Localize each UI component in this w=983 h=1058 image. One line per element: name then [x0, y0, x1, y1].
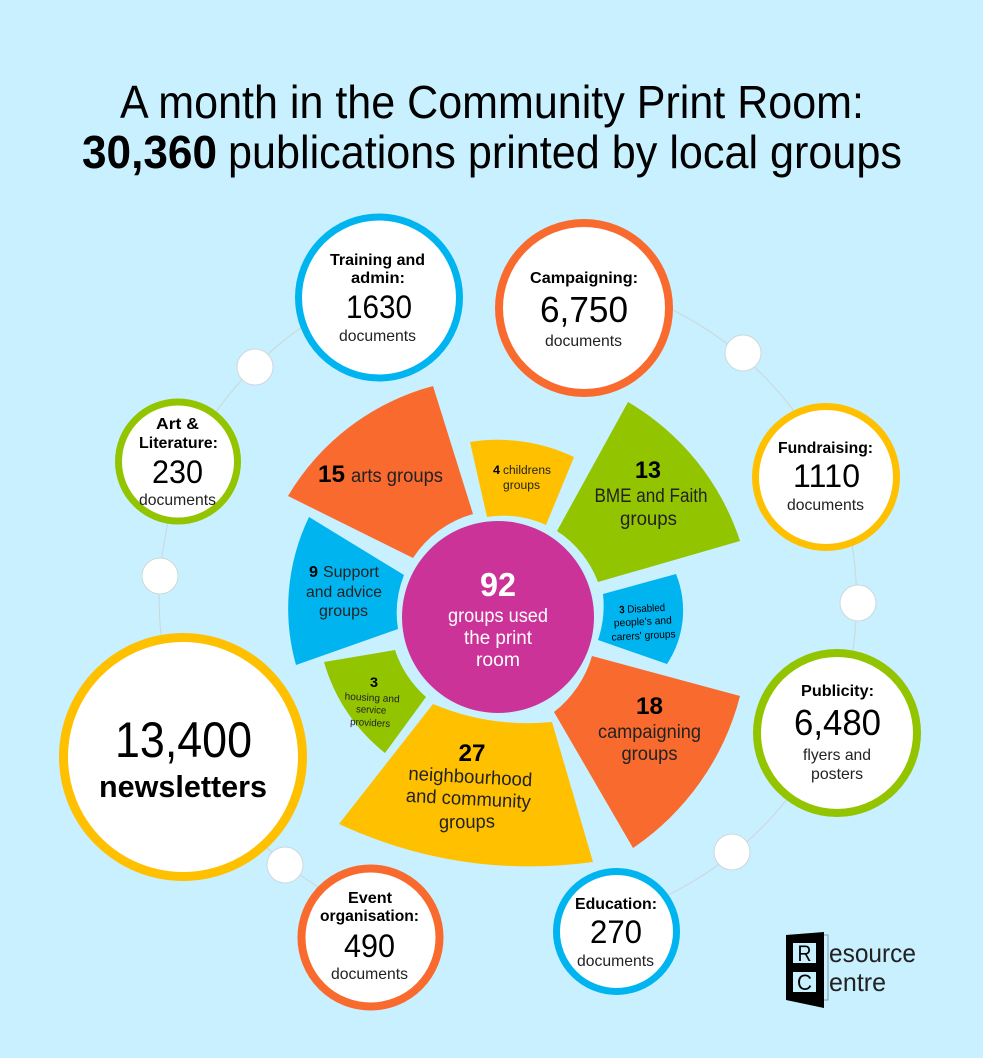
wedge: arts groups — [288, 386, 473, 558]
panel: publicity: 6,480 — [794, 702, 881, 743]
title: 30,360 — [82, 126, 217, 178]
panel: training and admin: Training and — [330, 252, 425, 269]
logo: Resource Centre: entre — [829, 967, 886, 997]
wedge: neighbourhood and community groups: groups — [439, 812, 495, 833]
centre circle: 92 groups: groups used — [448, 606, 548, 627]
panel: fundraising — [756, 406, 896, 548]
panel: event organisation: organisation: — [320, 908, 419, 925]
panel: fundraising: 1110 — [793, 458, 860, 494]
wedge: campaigning groups: groups — [622, 744, 678, 765]
wedge: campaigning groups: campaigning — [598, 722, 701, 743]
panel: art and literature: Literature: — [139, 435, 218, 452]
wedge: support and advice groups: and advice — [306, 584, 382, 601]
panel: education: documents — [577, 953, 654, 970]
wedge: neighbourhood and community groups: neighbourhood — [408, 764, 533, 791]
wedge: BME and faith groups: BME and Faith — [594, 486, 708, 507]
panel: newsletters — [64, 638, 302, 876]
panel: publicity: Publicity: — [801, 683, 874, 700]
wedge: childrens groups — [470, 440, 574, 525]
centre circle: 92 groups: room — [476, 650, 520, 671]
wedge: housing and service providers: service — [356, 704, 387, 717]
wedge: neighbourhood and community groups: 27 — [458, 740, 486, 767]
wedge: childrens groups: childrens — [503, 465, 551, 477]
panel: event organisation: 490 — [344, 928, 395, 964]
wedge: neighbourhood and community groups: and community — [405, 786, 532, 813]
panel: campaigning: 6,750 — [540, 289, 628, 330]
wedge: housing and service providers: providers — [350, 717, 390, 730]
panel: training and admin: documents — [339, 328, 416, 345]
panel: training and admin: admin: — [351, 270, 405, 287]
connector nodes — [142, 335, 876, 883]
wedge: arts groups: 15 — [318, 461, 345, 488]
wedge: support and advice groups: groups — [319, 603, 368, 620]
panel: art and literature — [118, 402, 238, 521]
wedge: BME and faith groups: 13 — [635, 457, 661, 484]
wedge: disabled and carers groups: carers' groups — [611, 628, 676, 644]
wedge: support and advice groups — [288, 517, 404, 665]
logo: Resource Centre — [786, 932, 916, 1008]
panel: campaigning — [499, 223, 669, 393]
panel: art and literature: Art & — [156, 416, 199, 433]
title: publications printed by local groups — [228, 126, 902, 178]
panel: campaigning: documents — [545, 333, 622, 350]
wedge: disabled and carers groups: people's and — [614, 614, 672, 630]
panel: education — [556, 872, 676, 992]
wedge: housing and service providers — [324, 650, 426, 753]
wedge: disabled and carers groups: 3 Disabled — [619, 602, 666, 616]
wedge: campaigning groups — [554, 656, 740, 848]
panel: campaigning: Campaigning: — [530, 270, 638, 287]
panel: publicity: posters — [811, 766, 863, 783]
title: A month in the Community Print Room: — [120, 76, 864, 128]
wedge: childrens groups: 4 — [493, 465, 501, 477]
panel: publicity — [757, 653, 917, 813]
panel: event organisation: documents — [331, 966, 408, 983]
panel: publicity: flyers and — [803, 747, 871, 764]
wedge: childrens groups: groups — [503, 480, 540, 492]
wedge: support and advice groups: 9 — [309, 564, 318, 581]
panel: education: Education: — [575, 896, 657, 913]
logo: Resource Centre: C — [797, 970, 812, 995]
panel: education: 270 — [590, 914, 642, 950]
panel: event organisation — [302, 868, 440, 1006]
panel: fundraising: Fundraising: — [778, 440, 873, 457]
panel: training and admin: 1630 — [346, 289, 412, 325]
wedge: arts groups: arts groups — [351, 466, 443, 487]
wedge: BME and faith groups — [557, 402, 740, 582]
centre circle: 92 groups — [402, 521, 594, 713]
wedge: neighbourhood and community groups — [339, 704, 593, 866]
wedge: BME and faith groups: groups — [620, 509, 677, 530]
centre circle: 92 groups: the print — [464, 628, 533, 649]
panel: art and literature: 230 — [152, 454, 203, 490]
wedge: support and advice groups: Support — [323, 564, 380, 581]
centre circle: 92 groups: 92 — [480, 566, 516, 603]
panel: fundraising: documents — [787, 497, 864, 514]
wedge: housing and service providers: housing and — [344, 692, 400, 705]
panel: newsletters: newsletters — [99, 769, 267, 804]
wedge: housing and service providers: 3 — [370, 674, 378, 690]
panel: art and literature: documents — [139, 492, 216, 509]
panel: newsletters: 13,400 — [115, 712, 252, 768]
panel: event organisation: Event — [348, 890, 392, 907]
logo: Resource Centre: esource — [829, 938, 916, 968]
wedge: campaigning groups: 18 — [636, 693, 663, 720]
panel: training and admin — [298, 217, 460, 378]
logo: Resource Centre: R — [798, 941, 812, 966]
connector lines — [159, 309, 857, 896]
wedge: disabled and carers groups — [598, 574, 683, 664]
title — [82, 76, 902, 178]
